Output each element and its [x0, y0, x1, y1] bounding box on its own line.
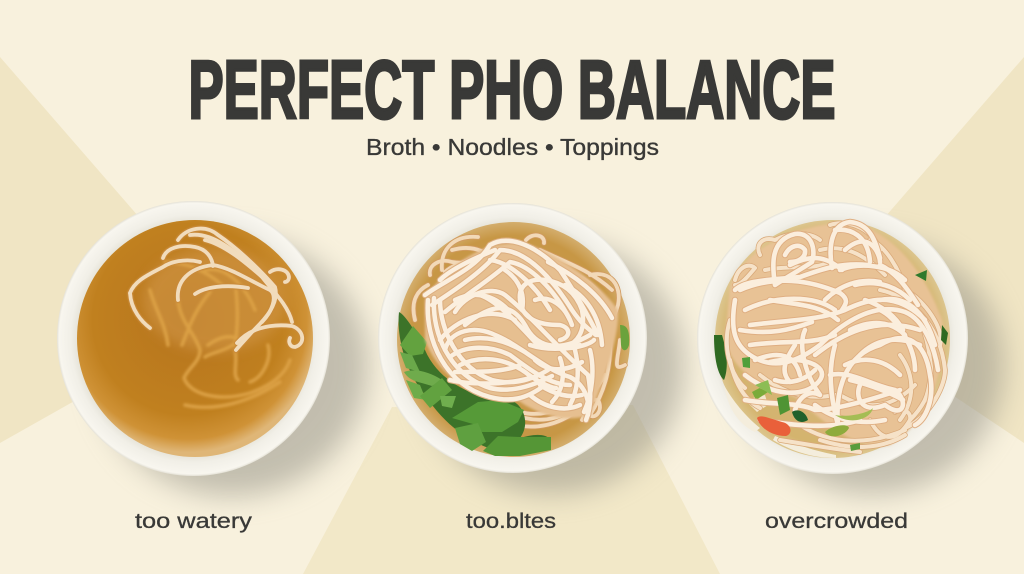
noodles back layer [727, 223, 945, 452]
herbs [399, 312, 629, 456]
noodles back layer [413, 235, 625, 427]
front noodle coil [425, 241, 612, 420]
broth [77, 220, 313, 457]
submerged noodles [150, 262, 290, 407]
label: too watery: too watery [135, 510, 253, 533]
bowl shadow [420, 238, 684, 494]
noodles near surface [130, 229, 302, 350]
bowl rim [378, 203, 647, 473]
noodle coil underlay [425, 243, 618, 418]
bowl: too watery [57, 201, 368, 496]
subtitle: Broth • Noodles • Toppings [366, 134, 659, 160]
label: too.bltes: too.bltes [466, 510, 556, 533]
background triangle: bottom centre [303, 405, 720, 574]
noodle mass underlay [725, 222, 943, 446]
broth [715, 220, 950, 458]
broth [397, 222, 630, 457]
label: overcrowded: overcrowded [765, 510, 908, 533]
bowl shadow [740, 238, 1004, 494]
noodle glow [143, 248, 287, 352]
vegetables on top [742, 270, 948, 451]
bowl rim [697, 202, 968, 474]
bowl: overcrowded [697, 202, 1004, 494]
background triangle: left [0, 57, 225, 443]
background triangle: right [812, 57, 1024, 443]
toppings [714, 335, 836, 458]
bowl: too bland [378, 203, 684, 494]
bowl shadow [96, 236, 368, 496]
bowl rim [57, 201, 330, 476]
noodles front layer [733, 222, 938, 426]
